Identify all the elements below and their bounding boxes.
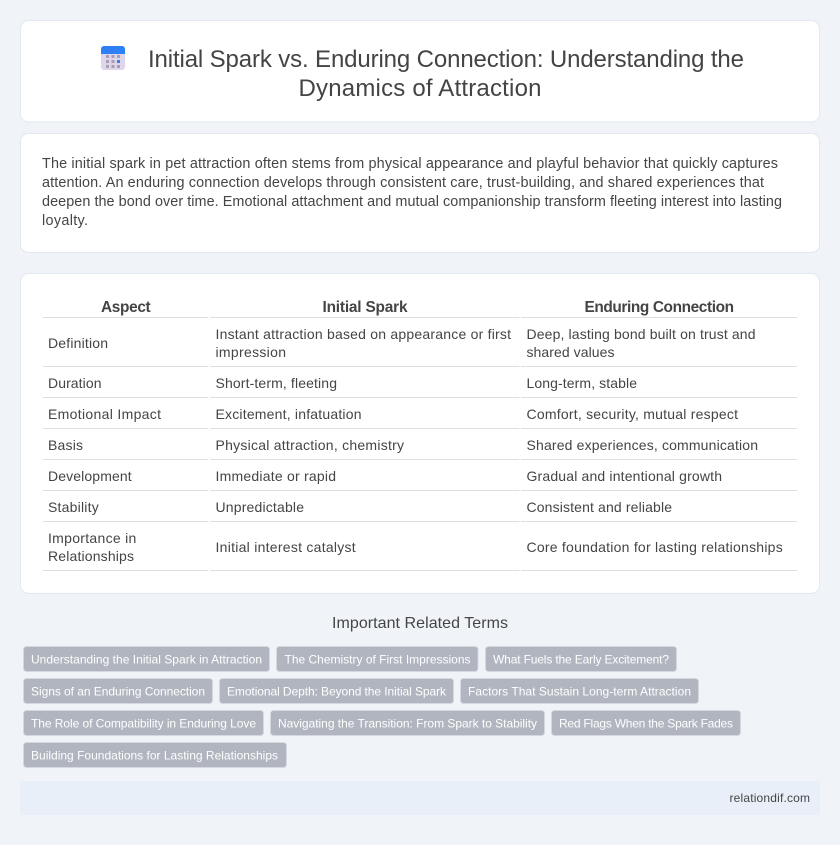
tags: related terms: Building Foundations for Lasting Relationships — [31, 748, 278, 762]
row: importance in relationships: Initial interest catalyst — [216, 539, 356, 555]
table header: Enduring Connection — [584, 299, 734, 316]
row: importance in relationships: Importance in — [48, 530, 136, 546]
tags: related terms: Red Flags When the Spark Fades — [559, 716, 733, 730]
panel: introduction — [20, 134, 820, 252]
row: definition: impression — [216, 344, 286, 360]
row: emotional impact: Emotional Impact — [48, 406, 161, 422]
row: importance in relationships — [48, 530, 783, 564]
title — [148, 46, 744, 102]
text block: introduction: deepen the bond over time. Emotional attachment and mutual companionship transform fleeting interest into lasting — [42, 194, 782, 210]
table header: Initial Spark — [322, 299, 408, 316]
row: duration: Long-term, stable — [526, 375, 637, 391]
tags: related terms: The Chemistry of First Impressions — [284, 652, 470, 666]
tags: related terms: Signs of an Enduring Connection — [31, 684, 205, 698]
row: duration: Duration — [48, 375, 102, 391]
row: stability: Consistent and reliable — [526, 499, 672, 515]
title: Initial Spark vs. Enduring Connection: Understanding the — [148, 46, 744, 73]
row: duration: Short-term, fleeting — [216, 375, 337, 391]
panel: header — [20, 20, 820, 122]
row: development: Development — [48, 468, 132, 484]
row: basis: Basis — [48, 437, 83, 453]
title: Dynamics of Attraction — [298, 75, 542, 102]
row: importance in relationships: Relationships — [48, 548, 134, 564]
tags: related terms — [24, 646, 740, 768]
panel: comparison table — [20, 274, 820, 594]
row: importance in relationships: Core foundation for lasting relationships — [526, 539, 783, 555]
row: development: Immediate or rapid — [216, 468, 336, 484]
icon: calendar — [101, 46, 125, 70]
row: emotional impact: Excitement, infatuation — [216, 406, 362, 422]
table header — [101, 299, 734, 316]
tags: related terms: Factors That Sustain Long-term Attraction — [468, 684, 691, 698]
tags: related terms: What Fuels the Early Excitement? — [493, 652, 669, 666]
row: development — [48, 468, 722, 484]
row: basis: Physical attraction, chemistry — [216, 437, 404, 453]
text block: introduction: attention. An enduring connection develops through consistent care, trust-building, and shared experiences that — [42, 175, 764, 191]
heading: important related terms: Important Related Terms — [332, 615, 508, 632]
footer: relationdif.com — [730, 791, 810, 805]
row: emotional impact — [48, 406, 738, 422]
row: definition: shared values — [526, 344, 614, 360]
row: development: Gradual and intentional growth — [526, 468, 722, 484]
row: stability: Stability — [48, 499, 99, 515]
row: definition: Definition — [48, 335, 108, 351]
row: stability: Unpredictable — [216, 499, 304, 515]
row: basis: Shared experiences, communication — [526, 437, 758, 453]
tags: related terms: Emotional Depth: Beyond the Initial Spark — [227, 684, 447, 698]
row: definition — [48, 326, 756, 360]
table header: Aspect — [101, 299, 151, 316]
tags: related terms: Navigating the Transition: From Spark to Stability — [278, 716, 537, 730]
row: definition: Instant attraction based on appearance or first — [216, 326, 511, 342]
row: definition: Deep, lasting bond built on trust and — [526, 326, 756, 342]
text block: introduction — [42, 156, 782, 229]
row: duration — [48, 375, 637, 391]
tags: related terms: Understanding the Initial Spark in Attraction — [31, 652, 262, 666]
tags: related terms: The Role of Compatibility in Enduring Love — [31, 716, 256, 730]
text block: introduction: The initial spark in pet attraction often stems from physical appearance and playful behavior that quickly captures — [42, 156, 778, 172]
row: basis — [48, 437, 758, 453]
footer — [20, 781, 820, 815]
row: stability — [48, 499, 672, 515]
row: emotional impact: Comfort, security, mutual respect — [526, 406, 738, 422]
text block: introduction: loyalty. — [42, 213, 88, 229]
